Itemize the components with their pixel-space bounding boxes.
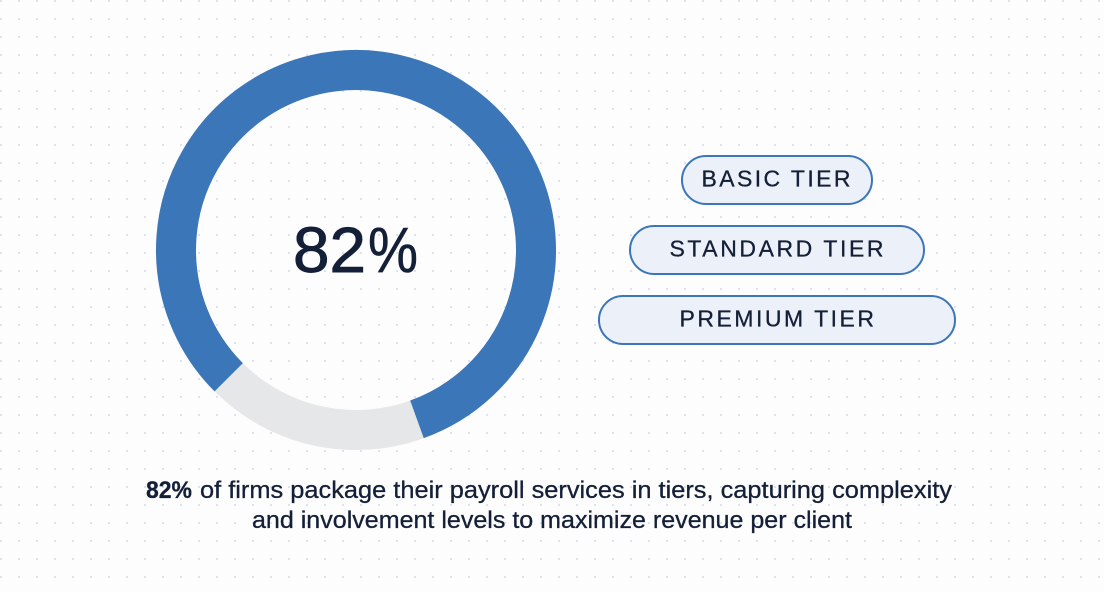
donut center value [293, 214, 418, 286]
donut center value: % [368, 214, 418, 286]
caption [146, 477, 952, 534]
donut chart: 82 percent [176, 70, 536, 430]
pill: premium tier [599, 296, 955, 344]
tier list [599, 156, 955, 344]
donut remainder: 18 percent [176, 70, 536, 430]
caption line one: of firms package their payroll services in tiers, capturing complexity [200, 477, 952, 504]
pill: basic tier [682, 156, 872, 204]
pill: standard tier: STANDARD TIER [670, 236, 884, 262]
pill: standard tier [630, 226, 924, 274]
donut center value: 82 [293, 214, 366, 286]
pill: premium tier: PREMIUM TIER [680, 306, 874, 332]
caption line two: and involvement levels to maximize revenue per client [252, 507, 852, 534]
pill: basic tier: BASIC TIER [702, 166, 850, 192]
caption bold figure: 82% [146, 477, 192, 504]
donut value arc: 82 percent [176, 70, 536, 419]
